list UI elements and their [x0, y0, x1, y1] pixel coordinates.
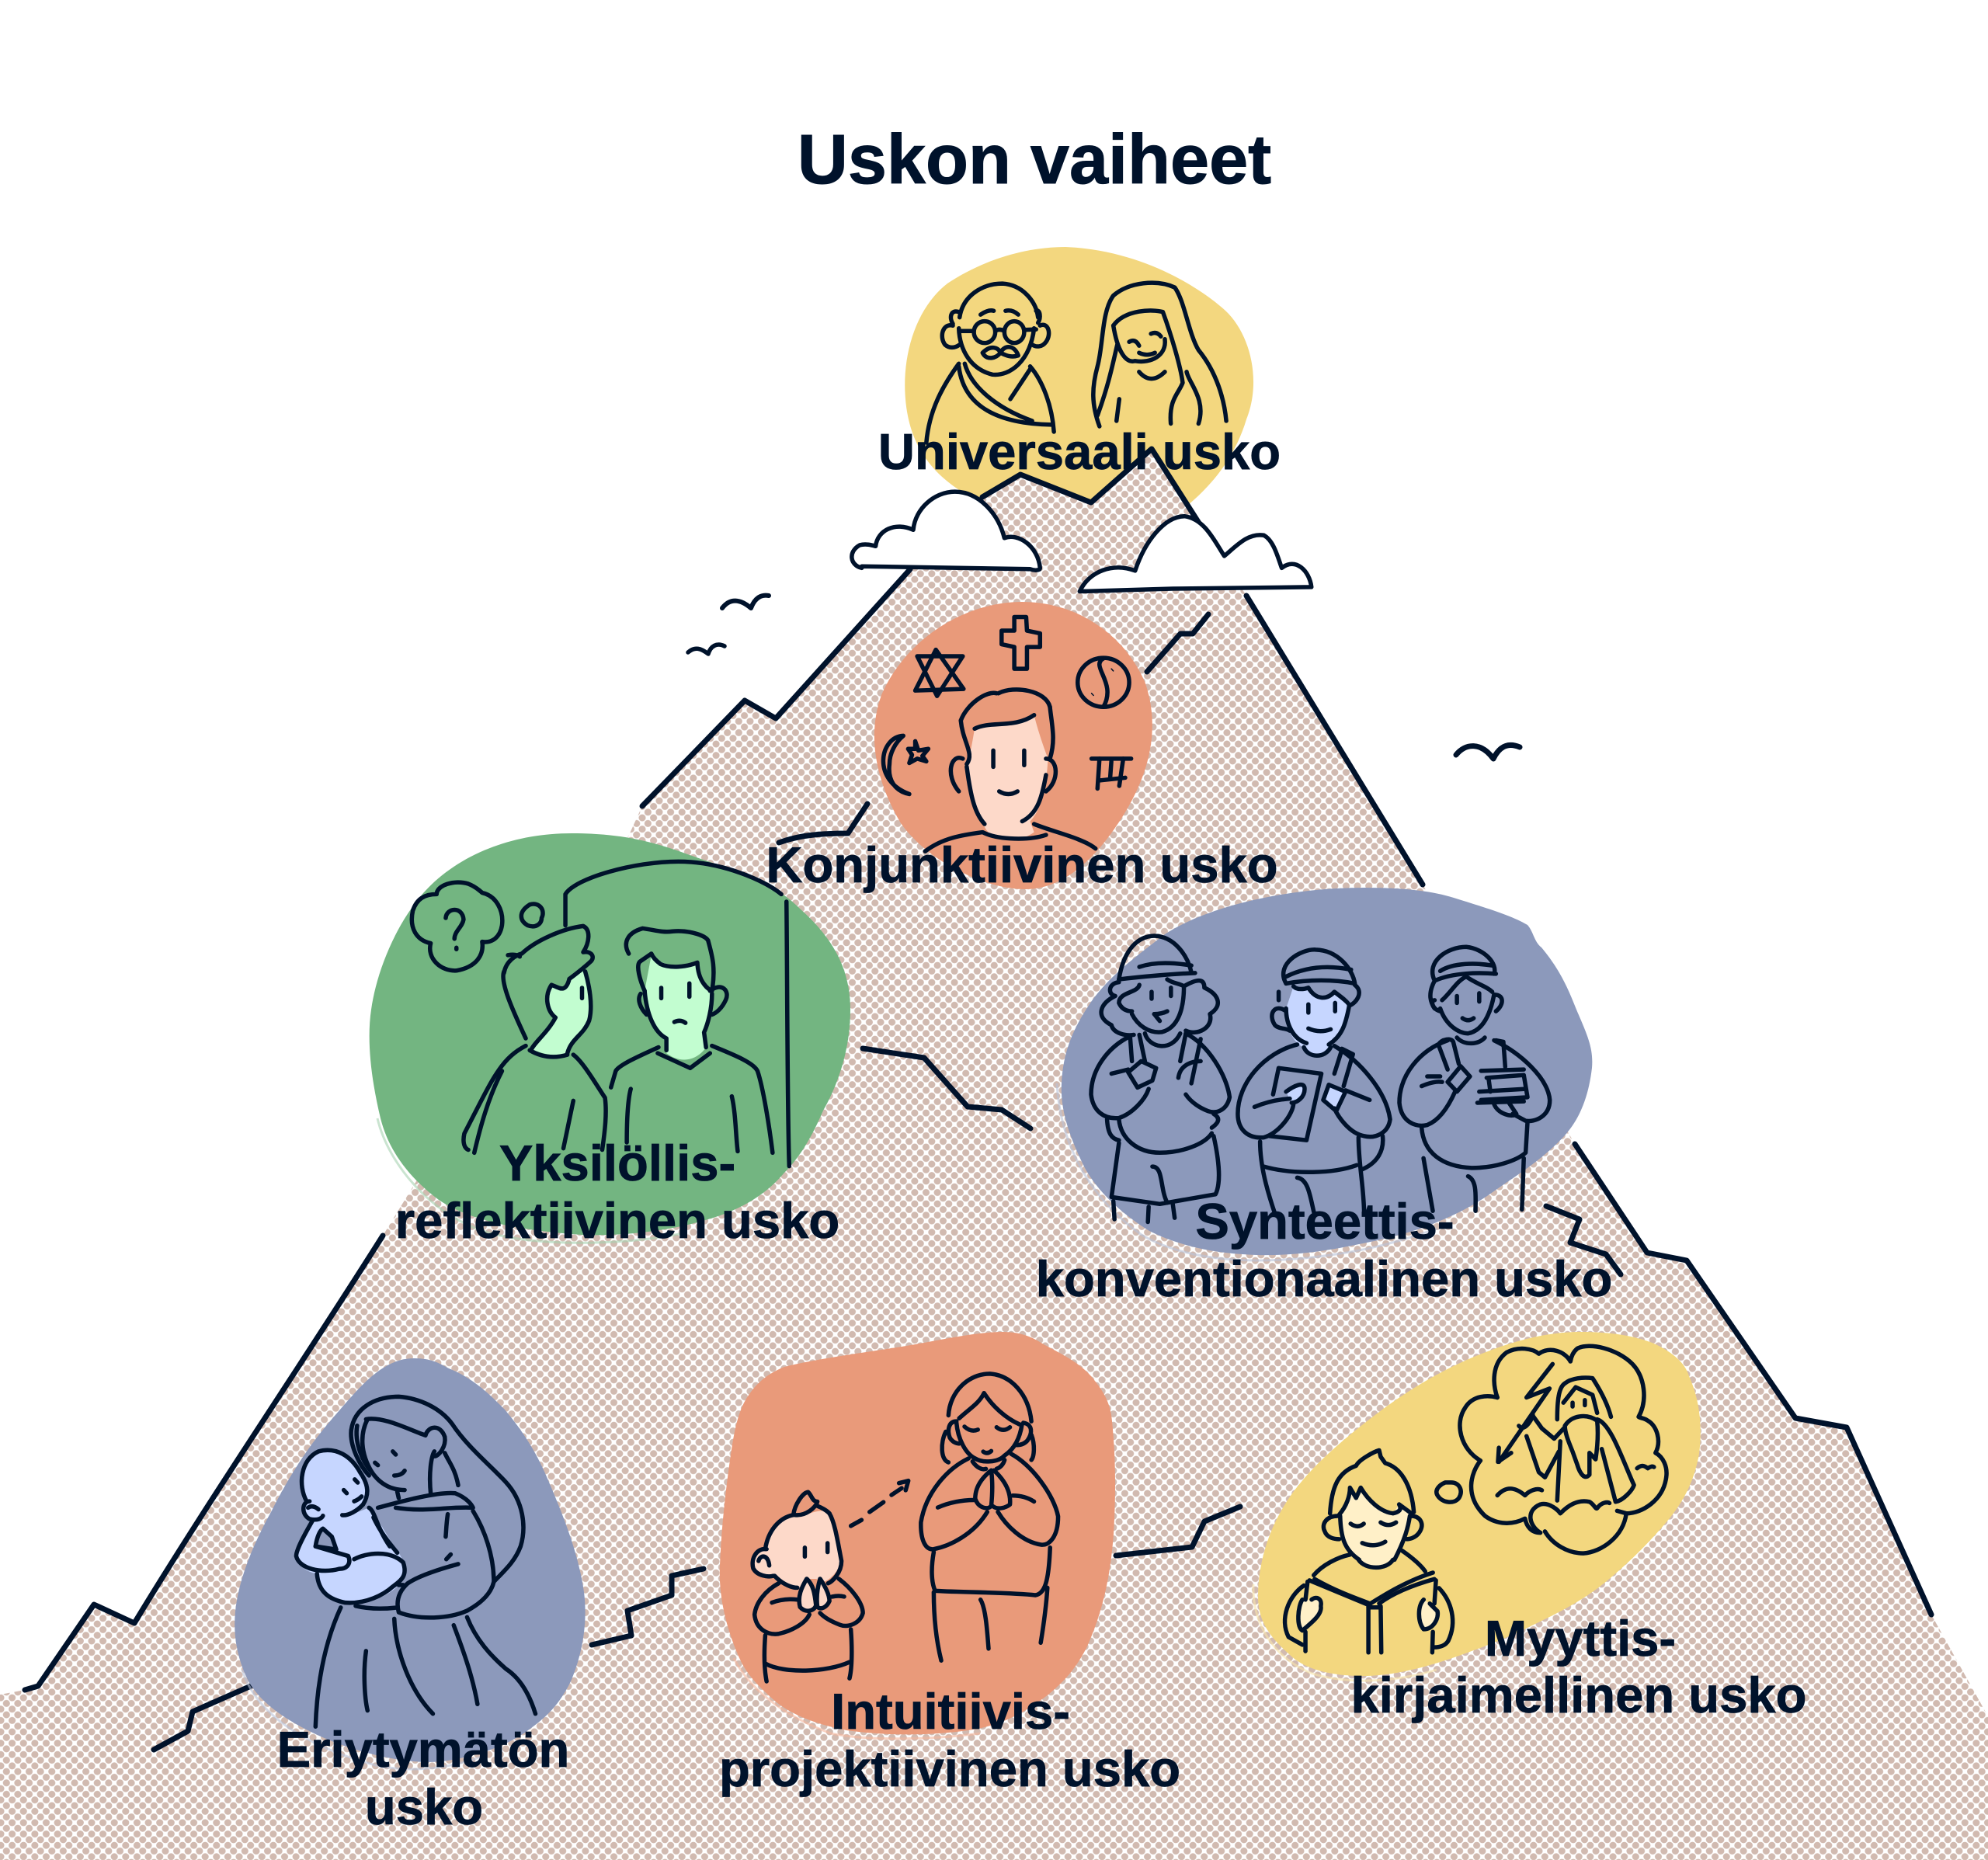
- panel: synthetic-conventional faith: [1057, 888, 1592, 1260]
- figure: child imitating a praying adult: [752, 1374, 1058, 1681]
- blob: orange background: [874, 602, 1152, 889]
- figure: child reading and imagining a god in a cloud: [1285, 1346, 1667, 1653]
- sketch ring: [242, 1670, 481, 1769]
- label: Yksilöllis-reflektiivinen usko: reflektiivinen usko: [395, 1192, 839, 1249]
- sketch ring: [1057, 1083, 1437, 1260]
- label: Eriytymätön usko: [277, 1721, 569, 1835]
- label: Konjunktiivinen usko: Konjunktiivinen usko: [766, 836, 1278, 893]
- label: Intuitiivis-projektiivinen usko: [719, 1683, 1180, 1797]
- label: Synteettis-konventionaalinen usko: konventionaalinen usko: [1036, 1250, 1612, 1307]
- title: Uskon vaiheet: [798, 121, 1271, 199]
- label: Myyttis-kirjaimellinen usko: [1351, 1610, 1806, 1723]
- icon: clouds: [852, 492, 1312, 592]
- sketch ring: [734, 1658, 980, 1739]
- panel: conjunctive faith: [874, 602, 1152, 889]
- sketch ring: [1253, 1584, 1437, 1681]
- panel: undifferentiated faith: [235, 1358, 586, 1769]
- label: Yksilöllis-reflektiivinen usko: [395, 1135, 839, 1249]
- figure: mother holding a baby: [296, 1396, 535, 1726]
- label: Synteettis-konventionaalinen usko: [1036, 1193, 1612, 1307]
- blob: universal faith yellow background: [905, 247, 1253, 505]
- label: Yksilöllis-reflektiivinen usko: Yksilöllis-: [499, 1135, 735, 1191]
- blob: orange background: [720, 1332, 1115, 1734]
- sketch ring: [377, 1118, 683, 1243]
- mountain: [0, 449, 1988, 1860]
- panel: universal faith figures: [926, 283, 1226, 443]
- blob: blue background: [235, 1358, 586, 1762]
- label: Myyttis-kirjaimellinen usko: Myyttis-: [1485, 1610, 1676, 1667]
- icon: birds: [688, 596, 1520, 759]
- figure: old man: [926, 283, 1054, 443]
- blob: yellow background: [1258, 1332, 1701, 1676]
- label: Universaali usko: Universaali usko: [878, 423, 1281, 480]
- figure: old woman: [1093, 283, 1226, 426]
- label: Intuitiivis-projektiivinen usko: projektiivinen usko: [719, 1740, 1180, 1797]
- label: Eriytymätön usko: Eriytymätön: [277, 1721, 569, 1778]
- panel: mythic-literal faith: [1253, 1332, 1701, 1681]
- figure: three students: [1091, 936, 1550, 1222]
- label: Myyttis-kirjaimellinen usko: kirjaimellinen usko: [1351, 1667, 1806, 1723]
- figure: person looking in a mirror: [412, 861, 789, 1166]
- mountain outline and cracks: [25, 449, 1931, 1750]
- blob: green background: [370, 833, 850, 1235]
- label: Synteettis-konventionaalinen usko: Synteettis-: [1195, 1193, 1455, 1250]
- label: Eriytymätön usko: usko: [365, 1778, 483, 1835]
- label: Intuitiivis-projektiivinen usko: Intuitiivis-: [831, 1683, 1070, 1740]
- panel: individual-reflective faith: [370, 833, 850, 1243]
- figure: person with religious symbols: [883, 617, 1131, 851]
- blob: blue background: [1062, 888, 1592, 1255]
- panel: intuitive-projective faith: [720, 1332, 1115, 1739]
